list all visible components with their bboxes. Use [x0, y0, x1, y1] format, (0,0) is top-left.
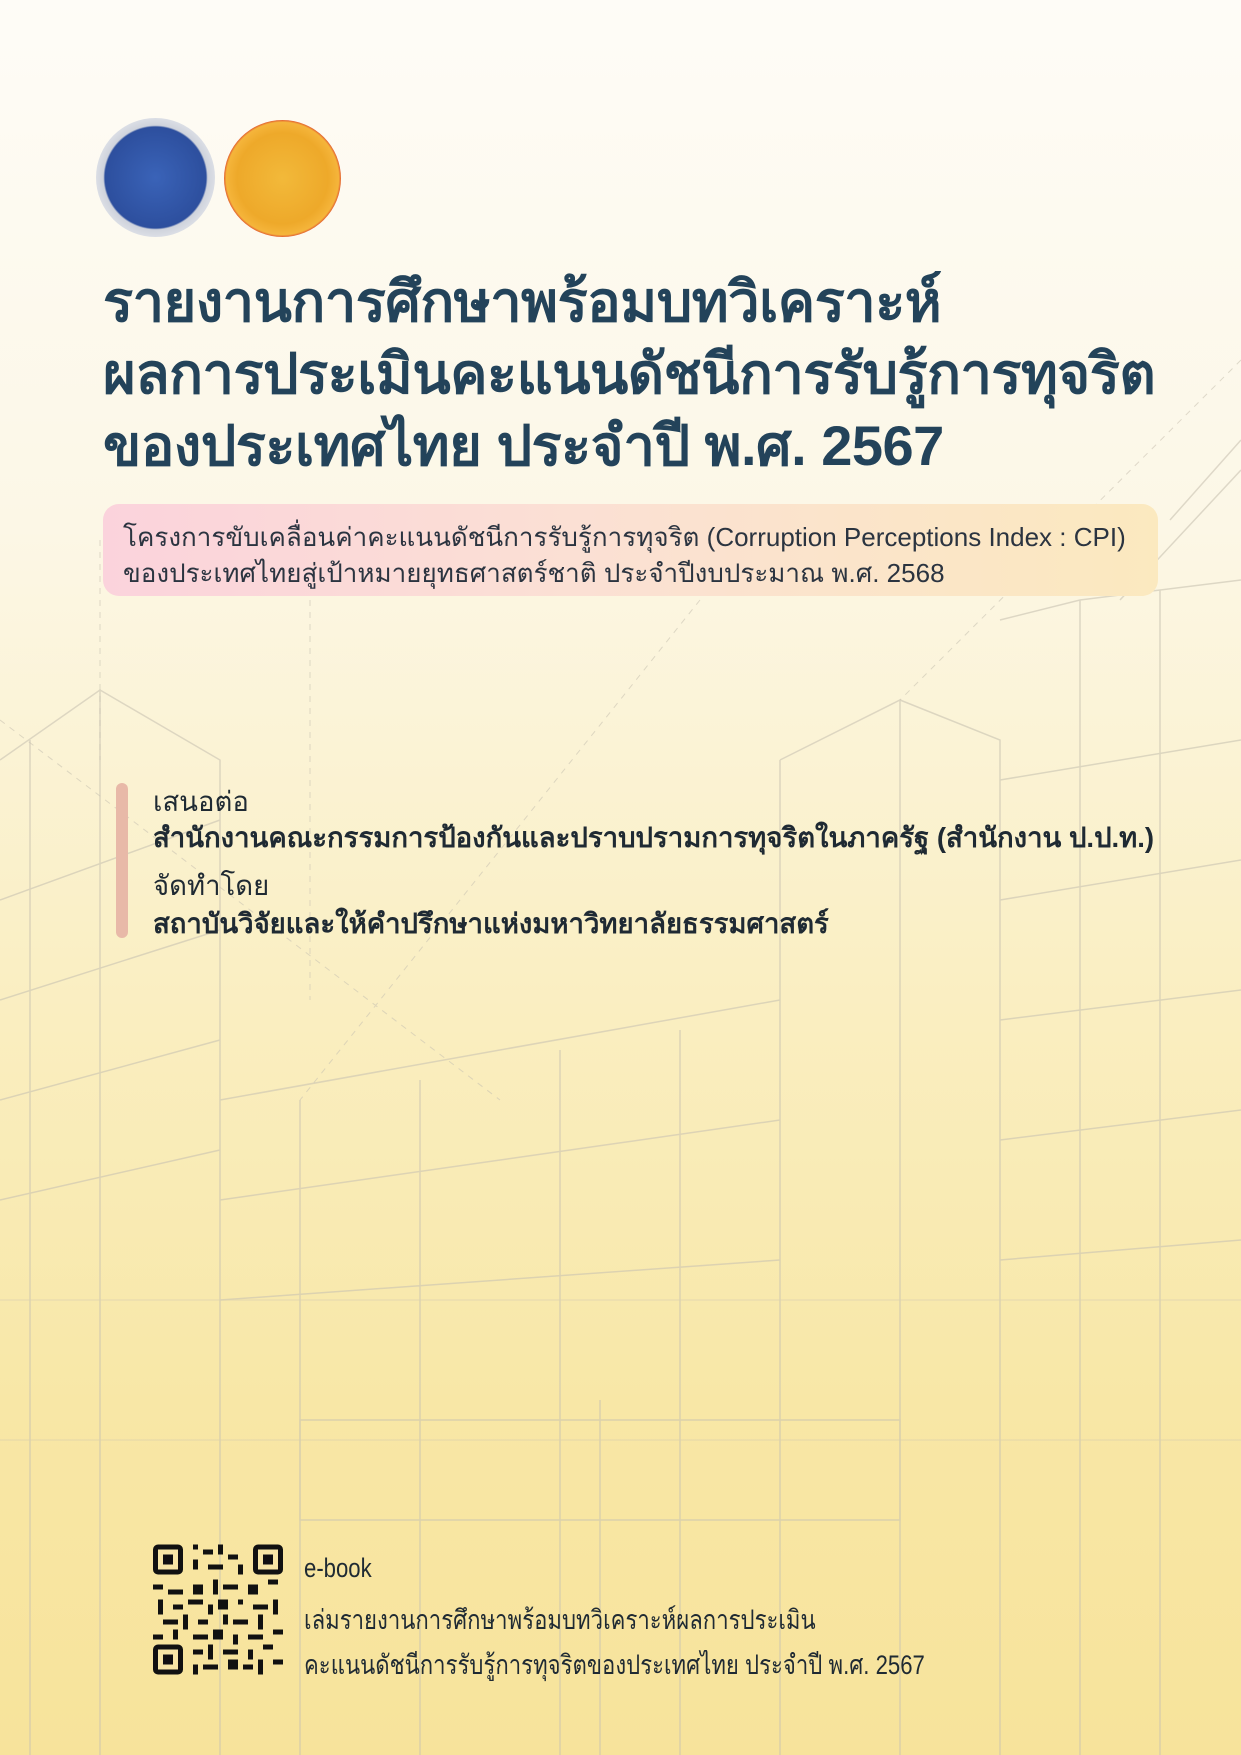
e-book text: เล่มรายงานการศึกษาพร้อมบทวิเคราะห์ผลการประเมิน	[304, 1605, 816, 1635]
presented to / prepared by: สำนักงานคณะกรรมการป้องกันและปราบปรามการทุจริตในภาครัฐ (สำนักงาน ป.ป.ท.)	[153, 822, 1154, 853]
e-book text: e-book	[304, 1553, 372, 1583]
logo: Thammasat	[224, 120, 341, 237]
title	[103, 270, 1155, 477]
QR code	[153, 1544, 283, 1674]
e-book text: คะแนนดัชนีการรับรู้การทุจริตของประเทศไทย ประจำปี พ.ศ. 2567	[304, 1650, 925, 1680]
accent bar	[116, 783, 128, 938]
presented to / prepared by: จัดทำโดย	[153, 870, 269, 901]
presented to / prepared by: เสนอต่อ	[153, 786, 249, 817]
title: รายงานการศึกษาพร้อมบทวิเคราะห์	[103, 270, 941, 333]
title: ผลการประเมินคะแนนดัชนีการรับรู้การทุจริต	[103, 342, 1155, 405]
subtitle box: โครงการขับเคลื่อนค่าคะแนนดัชนีการรับรู้การทุจริต (Corruption Perceptions Index : CPI)	[123, 522, 1126, 552]
presented to / prepared by: สถาบันวิจัยและให้คำปรึกษาแห่งมหาวิทยาลัยธรรมศาสตร์	[153, 908, 829, 939]
logo: NACC	[96, 118, 215, 237]
presented to / prepared by	[153, 786, 1154, 939]
subtitle box: ของประเทศไทยสู่เป้าหมายยุทธศาสตร์ชาติ ประจำปีงบประมาณ พ.ศ. 2568	[123, 558, 945, 588]
e-book text	[304, 1553, 925, 1682]
title: ของประเทศไทย ประจำปี พ.ศ. 2567	[103, 414, 944, 477]
subtitle box	[103, 504, 1158, 596]
